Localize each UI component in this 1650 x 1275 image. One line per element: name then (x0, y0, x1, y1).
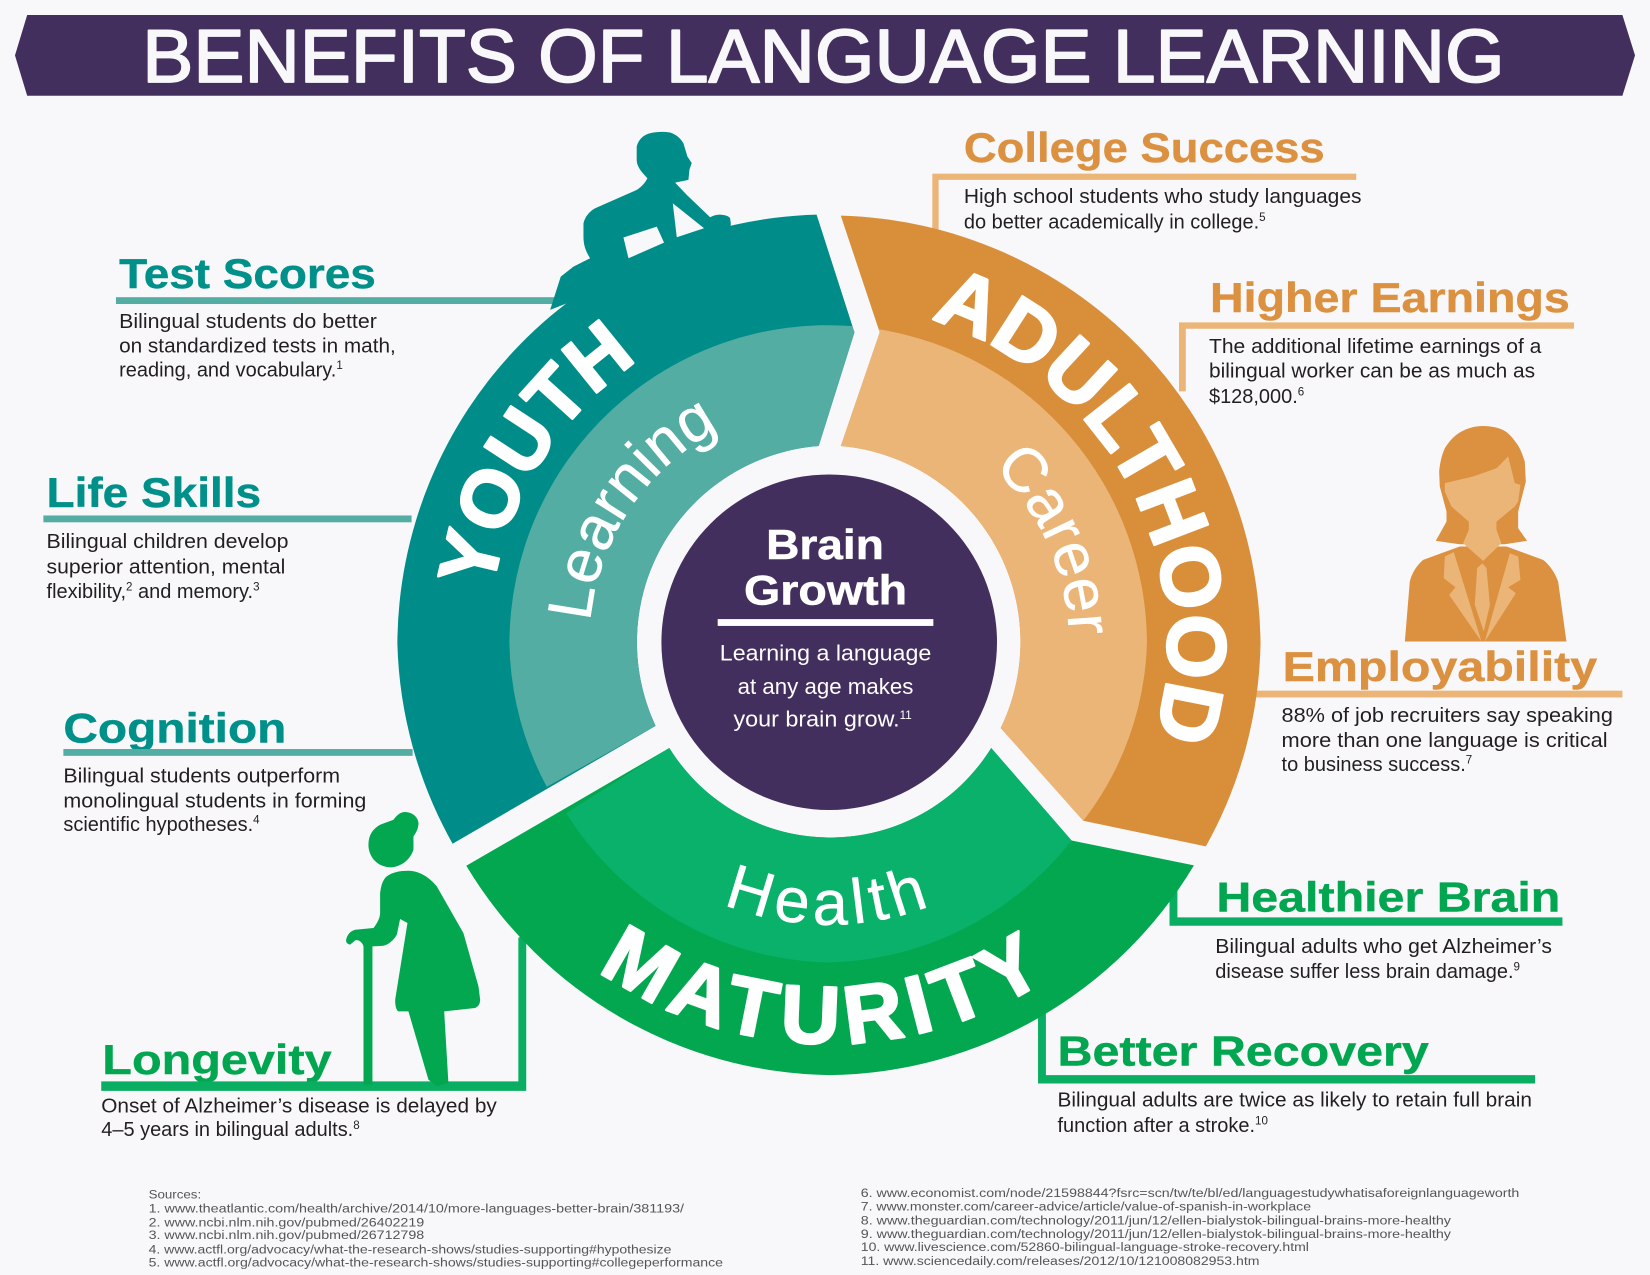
ring segment: adulthood (840, 216, 1260, 846)
ring segment: maturity (466, 748, 1194, 1076)
text: longevity: 8 (353, 1120, 360, 1132)
icon: elderly woman with cane (346, 812, 480, 1086)
heading: higher earnings: Higher Earnings (1210, 274, 1570, 321)
heading: healthier brain: Healthier Brain (1216, 874, 1560, 921)
text: employability: to business success. (1282, 754, 1472, 776)
label: career: Career (1002, 448, 1103, 633)
panel: cognition (63, 705, 413, 836)
heading: brain growth: Growth (744, 566, 907, 613)
text: higher earnings: bilingual worker can be as much as (1209, 361, 1535, 383)
label: maturity: MATURITY (600, 924, 1030, 1046)
panel: brain growth centre (661, 474, 997, 810)
label: adulthood: ADULTHOOD (932, 273, 1228, 742)
text: healthier brain: Bilingual adults who get Alzheimer’s (1215, 936, 1552, 958)
text: cognition: Bilingual students outperform (63, 766, 340, 788)
sources: right column: 11. www.sciencedaily.com/releases/2012/10/121008082953.htm (861, 1254, 1259, 1268)
text: college success: High school students who study languages (964, 186, 1362, 208)
text: cognition: monolingual students in forming (63, 790, 366, 812)
text: higher earnings: The additional lifetime earnings of a (1209, 336, 1542, 358)
text: cognition: scientific hypotheses. (63, 814, 260, 836)
text: higher earnings: $128,000. (1209, 386, 1304, 408)
text: test scores: 1 (336, 360, 343, 372)
text: test scores: reading, and vocabulary. (119, 360, 343, 382)
text: higher earnings: 6 (1298, 387, 1304, 399)
sources: right column: 10. www.livescience.com/52860-bilingual-language-stroke-recovery.html (861, 1240, 1309, 1254)
sources: right column: 9. www.theguardian.com/technology/2011/jun/12/ellen-bialystok-bilingual-brains-more-healthy (861, 1227, 1452, 1241)
sources: right column: 8. www.theguardian.com/technology/2011/jun/12/ellen-bialystok-bilingual-brains-more-healthy (861, 1213, 1452, 1227)
sources: right column: 6. www.economist.com/node/21598844?fsrc=scn/tw/te/bl/ed/languagestudywhatisaforeignlanguageworth (861, 1186, 1519, 1200)
text: healthier brain: 9 (1514, 961, 1520, 973)
heading: test scores: Test Scores (119, 250, 376, 297)
text: better recovery: Bilingual adults are twice as likely to retain full brain (1057, 1090, 1532, 1112)
panel: healthier brain (1170, 874, 1562, 983)
label: learning: Learning (548, 402, 718, 617)
text: life skills: 2 (126, 582, 133, 594)
text: employability: 88% of job recruiters say speaking (1282, 705, 1613, 727)
text: brain growth: Learning a language (720, 641, 931, 666)
heading: longevity: Longevity (102, 1036, 332, 1083)
text: cognition: 4 (253, 815, 260, 827)
text: longevity: 4–5 years in bilingual adults. (101, 1119, 360, 1141)
panel: higher earnings (1179, 274, 1574, 408)
title banner (15, 14, 1635, 98)
heading: cognition: Cognition (63, 705, 286, 752)
panel: better recovery (1038, 1010, 1535, 1137)
heading: employability: Employability (1283, 643, 1598, 690)
text: employability: more than one language is critical (1282, 730, 1608, 752)
icon: crawling baby (550, 132, 731, 310)
sources: right column: 7. www.monster.com/career-advice/article/value-of-spanish-in-workplace (861, 1200, 1311, 1214)
icon: woman professional (1405, 426, 1566, 641)
text: healthier brain: disease suffer less brain damage. (1215, 961, 1520, 983)
sources: left column: 3. www.ncbi.nlm.nih.gov/pubmed/26712798 (149, 1228, 425, 1242)
sources: left column: 1. www.theatlantic.com/health/archive/2014/10/more-languages-better-brain/381193/ (149, 1201, 685, 1215)
text: life skills: and memory. (133, 581, 253, 603)
text: brain growth: at any age makes (738, 674, 913, 699)
ring segment: youth (397, 214, 854, 844)
sources: left column: Sources: (149, 1188, 201, 1202)
text: life skills: Bilingual children develop (47, 531, 288, 553)
sources: left column (149, 1188, 723, 1270)
panel: life skills (43, 469, 412, 603)
heading: brain growth: Brain (766, 521, 884, 568)
text: test scores: on standardized tests in math, (119, 335, 396, 357)
panel: test scores (116, 250, 563, 382)
sources: left column: 5. www.actfl.org/advocacy/what-the-research-shows/studies-supporting#collegeperformance (149, 1256, 723, 1270)
text: test scores: Bilingual students do better (119, 311, 377, 333)
text: better recovery: function after a stroke. (1057, 1115, 1268, 1137)
text: college success: 5 (1259, 212, 1266, 224)
label: youth: YOUTH (436, 318, 634, 578)
text: life skills: superior attention, mental (47, 556, 285, 578)
title: BENEFITS OF LANGUAGE LEARNING (142, 14, 1505, 98)
sources: right column (861, 1186, 1519, 1268)
panel: college success (932, 124, 1362, 237)
text: employability: 7 (1466, 755, 1472, 767)
panel: employability (1252, 643, 1622, 776)
heading: college success: College Success (964, 124, 1325, 171)
label: health: Health (728, 864, 926, 926)
text: life skills: flexibility, (47, 581, 260, 603)
heading: life skills: Life Skills (47, 469, 261, 516)
text: brain growth: 11 (900, 710, 912, 722)
text: better recovery: 10 (1255, 1116, 1268, 1128)
heading: better recovery: Better Recovery (1057, 1028, 1430, 1075)
sources: left column: 2. www.ncbi.nlm.nih.gov/pubmed/26402219 (149, 1216, 425, 1230)
text: brain growth: your brain grow. (733, 706, 900, 731)
text: college success: do better academically in college. (964, 211, 1266, 233)
sources: left column: 4. www.actfl.org/advocacy/what-the-research-shows/studies-supporting#hypothesize (149, 1242, 672, 1256)
text: longevity: Onset of Alzheimer’s disease is delayed by (101, 1095, 497, 1117)
text: life skills: 3 (253, 582, 260, 594)
panel: longevity (101, 937, 526, 1141)
